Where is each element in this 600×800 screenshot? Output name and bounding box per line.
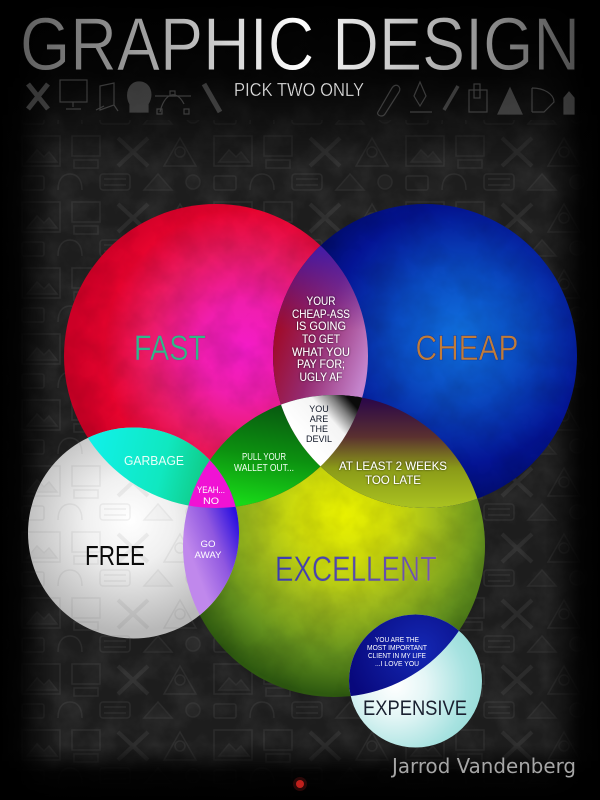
text: your cheap-ass: UGLY AF [300, 370, 342, 384]
icon: pen nib [410, 82, 432, 112]
icon: bezier curve [155, 91, 191, 114]
texture: mottled overlay [64, 204, 573, 668]
text: your cheap-ass: WHAT YOU [292, 345, 350, 359]
text: at least 2 weeks too late [339, 459, 447, 487]
circle: excellent [183, 395, 485, 697]
text: go away: AWAY [194, 550, 222, 561]
text: most important client: ...I LOVE YOU [375, 659, 419, 668]
watermark: author: Jarrod Vandenberg [390, 754, 576, 778]
text: garbage: GARBAGE [124, 454, 184, 468]
text: most important client: MOST IMPORTANT [367, 643, 427, 652]
lens: expensive and excellent [349, 614, 459, 696]
text: you are the devil [306, 404, 332, 444]
text: pull your wallet out: WALLET OUT... [234, 463, 294, 474]
venn diagram [20, 200, 580, 748]
texture: faint icons on free [28, 442, 192, 638]
icon: page curve [532, 88, 554, 112]
text: yeah no [197, 485, 225, 507]
icon: clipboard [469, 84, 487, 112]
circle: fast [64, 204, 368, 508]
text: your cheap-ass: YOUR [306, 294, 336, 308]
text: your cheap-ass: PAY FOR; [297, 357, 345, 371]
text: you are the devil: YOU [309, 404, 329, 414]
text: at least 2 weeks too late: AT LEAST 2 WEEKS [339, 459, 447, 473]
text: go away: GO [200, 539, 216, 550]
center: fast cheap excellent [281, 395, 362, 466]
text: pull your wallet out [234, 452, 294, 474]
circle: cheap [273, 204, 577, 508]
label: excellent: EXCELLENT [275, 550, 437, 589]
lens: cheap and excellent [281, 395, 478, 508]
text: you are the devil: ARE [310, 414, 328, 424]
icon: bottle [564, 92, 574, 114]
circle: free [28, 428, 239, 638]
circle: expensive [349, 614, 482, 748]
text: at least 2 weeks too late: TOO LATE [365, 473, 421, 487]
icon: drafting triangle [498, 88, 522, 114]
lens: fast and excellent [210, 395, 361, 507]
lens: fast and cheap [273, 246, 368, 404]
text: pull your wallet out: PULL YOUR [242, 452, 286, 463]
text: your cheap-ass [292, 294, 350, 384]
text: you are the devil: DEVIL [306, 434, 332, 444]
text: your cheap-ass: CHEAP-ASS [292, 307, 350, 321]
text: your cheap-ass: TO GET [302, 332, 341, 346]
text: your cheap-ass: IS GOING [296, 319, 346, 333]
label: fast: FAST [134, 329, 206, 368]
text: you are the devil: THE [310, 424, 328, 434]
logo: bottom mark [293, 777, 307, 791]
text: most important client: CLIENT IN MY LIFE [368, 651, 426, 660]
text: yeah no: YEAH... [197, 485, 225, 496]
label: expensive: EXPENSIVE [363, 697, 467, 720]
icon: marker pen [204, 84, 220, 112]
label: cheap: CHEAP [416, 329, 518, 368]
text: most important client [367, 635, 427, 668]
icon: dropper [444, 86, 458, 110]
text: most important client: YOU ARE THE [375, 635, 419, 644]
lens: fast and free [88, 428, 236, 506]
icon: 3D box [96, 83, 118, 111]
icon row [28, 80, 574, 116]
lens: free and excellent [183, 480, 239, 616]
label: free: FREE [85, 540, 145, 571]
icon: paperclip [378, 85, 400, 116]
subtitle: PICK TWO ONLY [234, 80, 364, 100]
text: go away [194, 539, 222, 561]
icon: head with bulb [128, 82, 151, 112]
icon: monitor [60, 80, 87, 109]
text: yeah no: NO [203, 496, 219, 507]
center: fast free excellent [188, 460, 236, 508]
icon: crossed pencil and ruler [28, 84, 48, 109]
